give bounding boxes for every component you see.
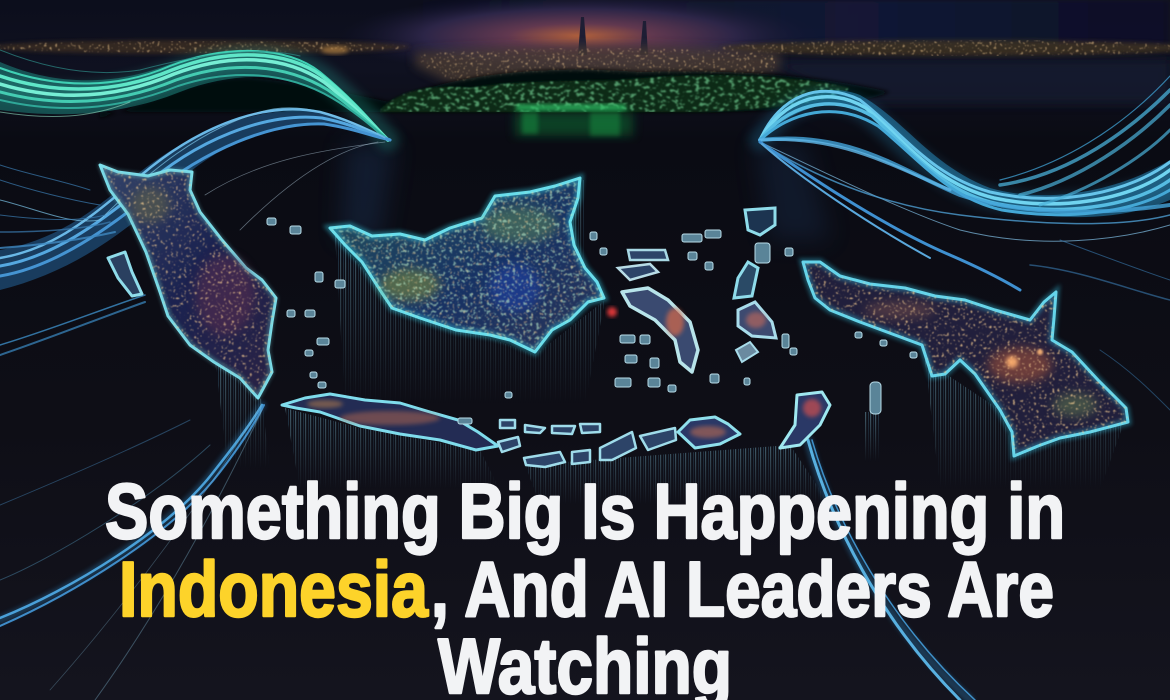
data streams: lower left and lower centre [0,295,975,700]
title line 2: highlighted word: Indonesia [119,545,429,633]
island: Sulawesi arcs [618,208,776,372]
island: scattered small isles [267,218,917,424]
island: Papua [803,262,1128,456]
data streams: right blue [760,76,1170,410]
title line 2: remainder: , And AI Leaders Are [431,545,1054,633]
water behind the city [760,60,1170,104]
distant city skyline [0,17,1170,92]
island: small west isle [108,252,142,296]
island: Sumatra [100,165,276,398]
green island with city glow [100,70,890,136]
island: Lesser Sunda chain [498,420,676,467]
sunset sky [340,0,820,78]
island: Flores and Timor [678,392,830,448]
island: Java [282,394,498,450]
red glow centre [607,307,617,317]
water reflections [340,143,395,240]
vertical light curtains under the islands [215,180,1125,505]
data streams: upper left green [0,50,390,140]
title [105,467,1065,700]
night sky [400,0,1170,48]
map of Indonesia [100,165,1128,467]
data streams: mid left blue [0,108,390,290]
island: Kalimantan [330,178,604,352]
